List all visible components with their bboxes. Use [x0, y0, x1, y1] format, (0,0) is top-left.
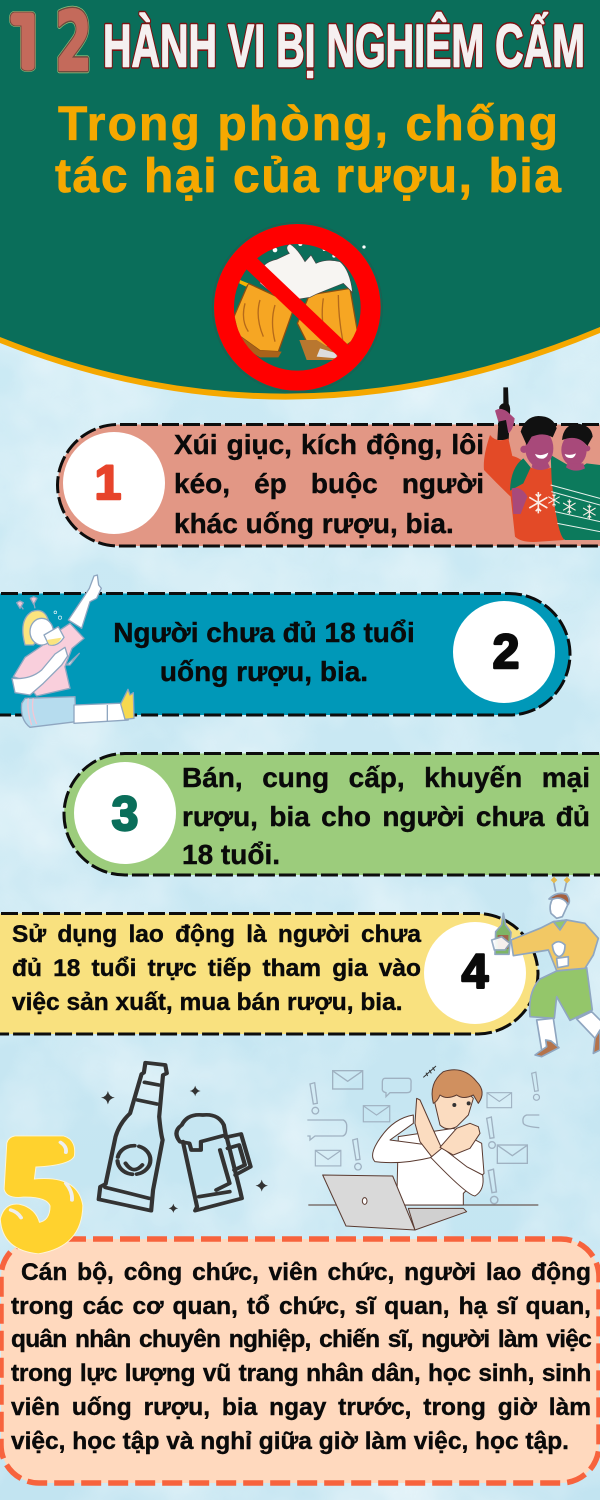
pill 1 shape: 1: [95, 457, 121, 510]
title: 12: [9, 0, 92, 90]
rule 5 text: việc, học tập và nghỉ giữa giờ làm việc, học tập.: [11, 1428, 569, 1455]
rule 3 text: [182, 762, 590, 870]
pill 3 shape: 3: [112, 788, 138, 841]
rule 2 text: uống rượu, bia.: [160, 656, 368, 687]
header: green banner with curved gold edge: [0, 0, 600, 400]
panel: rule 2: [0, 592, 572, 716]
subtitle: Trong phòng, chống: [58, 98, 558, 151]
subtitle: [55, 98, 562, 203]
number 5: big yellow numeral: [0, 1136, 84, 1254]
illustration: bottle and beer mug outlines: [96, 1060, 268, 1213]
rule 5 text: viên uống rượu, bia ngay trước, trong giờ làm: [11, 1394, 591, 1421]
rule 5 text: Cán bộ, công chức, viên chức, người lao động: [21, 1259, 591, 1286]
rule 3 text: Bán, cung cấp, khuyến mại: [182, 762, 590, 793]
panel: rule 1: [56, 423, 600, 548]
rule 5 text: trong lực lượng vũ trang nhân dân, học sinh, sinh: [11, 1360, 591, 1387]
rule 3 text: 18 tuổi.: [182, 839, 280, 870]
rule 1 text: [174, 429, 484, 540]
icon: no beer sign: [212, 222, 383, 393]
panel: rule 3: [62, 752, 600, 876]
pill 4 shape: 4: [462, 946, 489, 999]
rule 1 text: khác uống rượu, bia.: [174, 508, 454, 539]
panel: rule 4: [0, 912, 540, 1036]
pill 3 shape: [62, 752, 600, 876]
pill 2 shape: [0, 592, 572, 716]
rule 4 text: đủ 18 tuổi trực tiếp tham gia vào: [12, 955, 421, 982]
illustration: girl in pink shirt pointing up: [11, 574, 135, 728]
rule 5 text: [10, 1259, 592, 1455]
panel: rule 5: [0, 1236, 600, 1486]
pill 1 shape: [56, 423, 600, 548]
pill 2 shape: 2: [493, 626, 519, 679]
subtitle: tác hại của rượu, bia: [55, 150, 561, 203]
rule 5 text: quân nhân chuyên nghiệp, chiến sĩ, người làm việc: [11, 1326, 591, 1353]
rule 2 text: [113, 617, 415, 688]
illustration: man with glass and bottle: [490, 876, 600, 1058]
rule 5 text: trong các cơ quan, tổ chức, sĩ quan, hạ sĩ quan,: [11, 1293, 591, 1320]
pill 4 shape: [0, 912, 540, 1036]
box 5 shape: [0, 1236, 600, 1486]
rule 3 text: rượu, bia cho người chưa đủ: [182, 801, 590, 832]
rule 4 text: [12, 921, 422, 1016]
illustration: two men with bottle: [484, 387, 600, 542]
illustration: man crossing arms, laptop and message icons: [307, 1066, 540, 1230]
rule 1 text: Xúi giục, kích động, lôi: [174, 429, 484, 460]
rule 1 text: kéo, ép buộc người: [174, 468, 484, 499]
rule 2 text: Người chưa đủ 18 tuổi: [113, 617, 415, 648]
rule 4 text: việc sản xuất, mua bán rượu, bia.: [12, 989, 403, 1016]
rule 4 text: Sử dụng lao động là người chưa: [12, 921, 421, 948]
